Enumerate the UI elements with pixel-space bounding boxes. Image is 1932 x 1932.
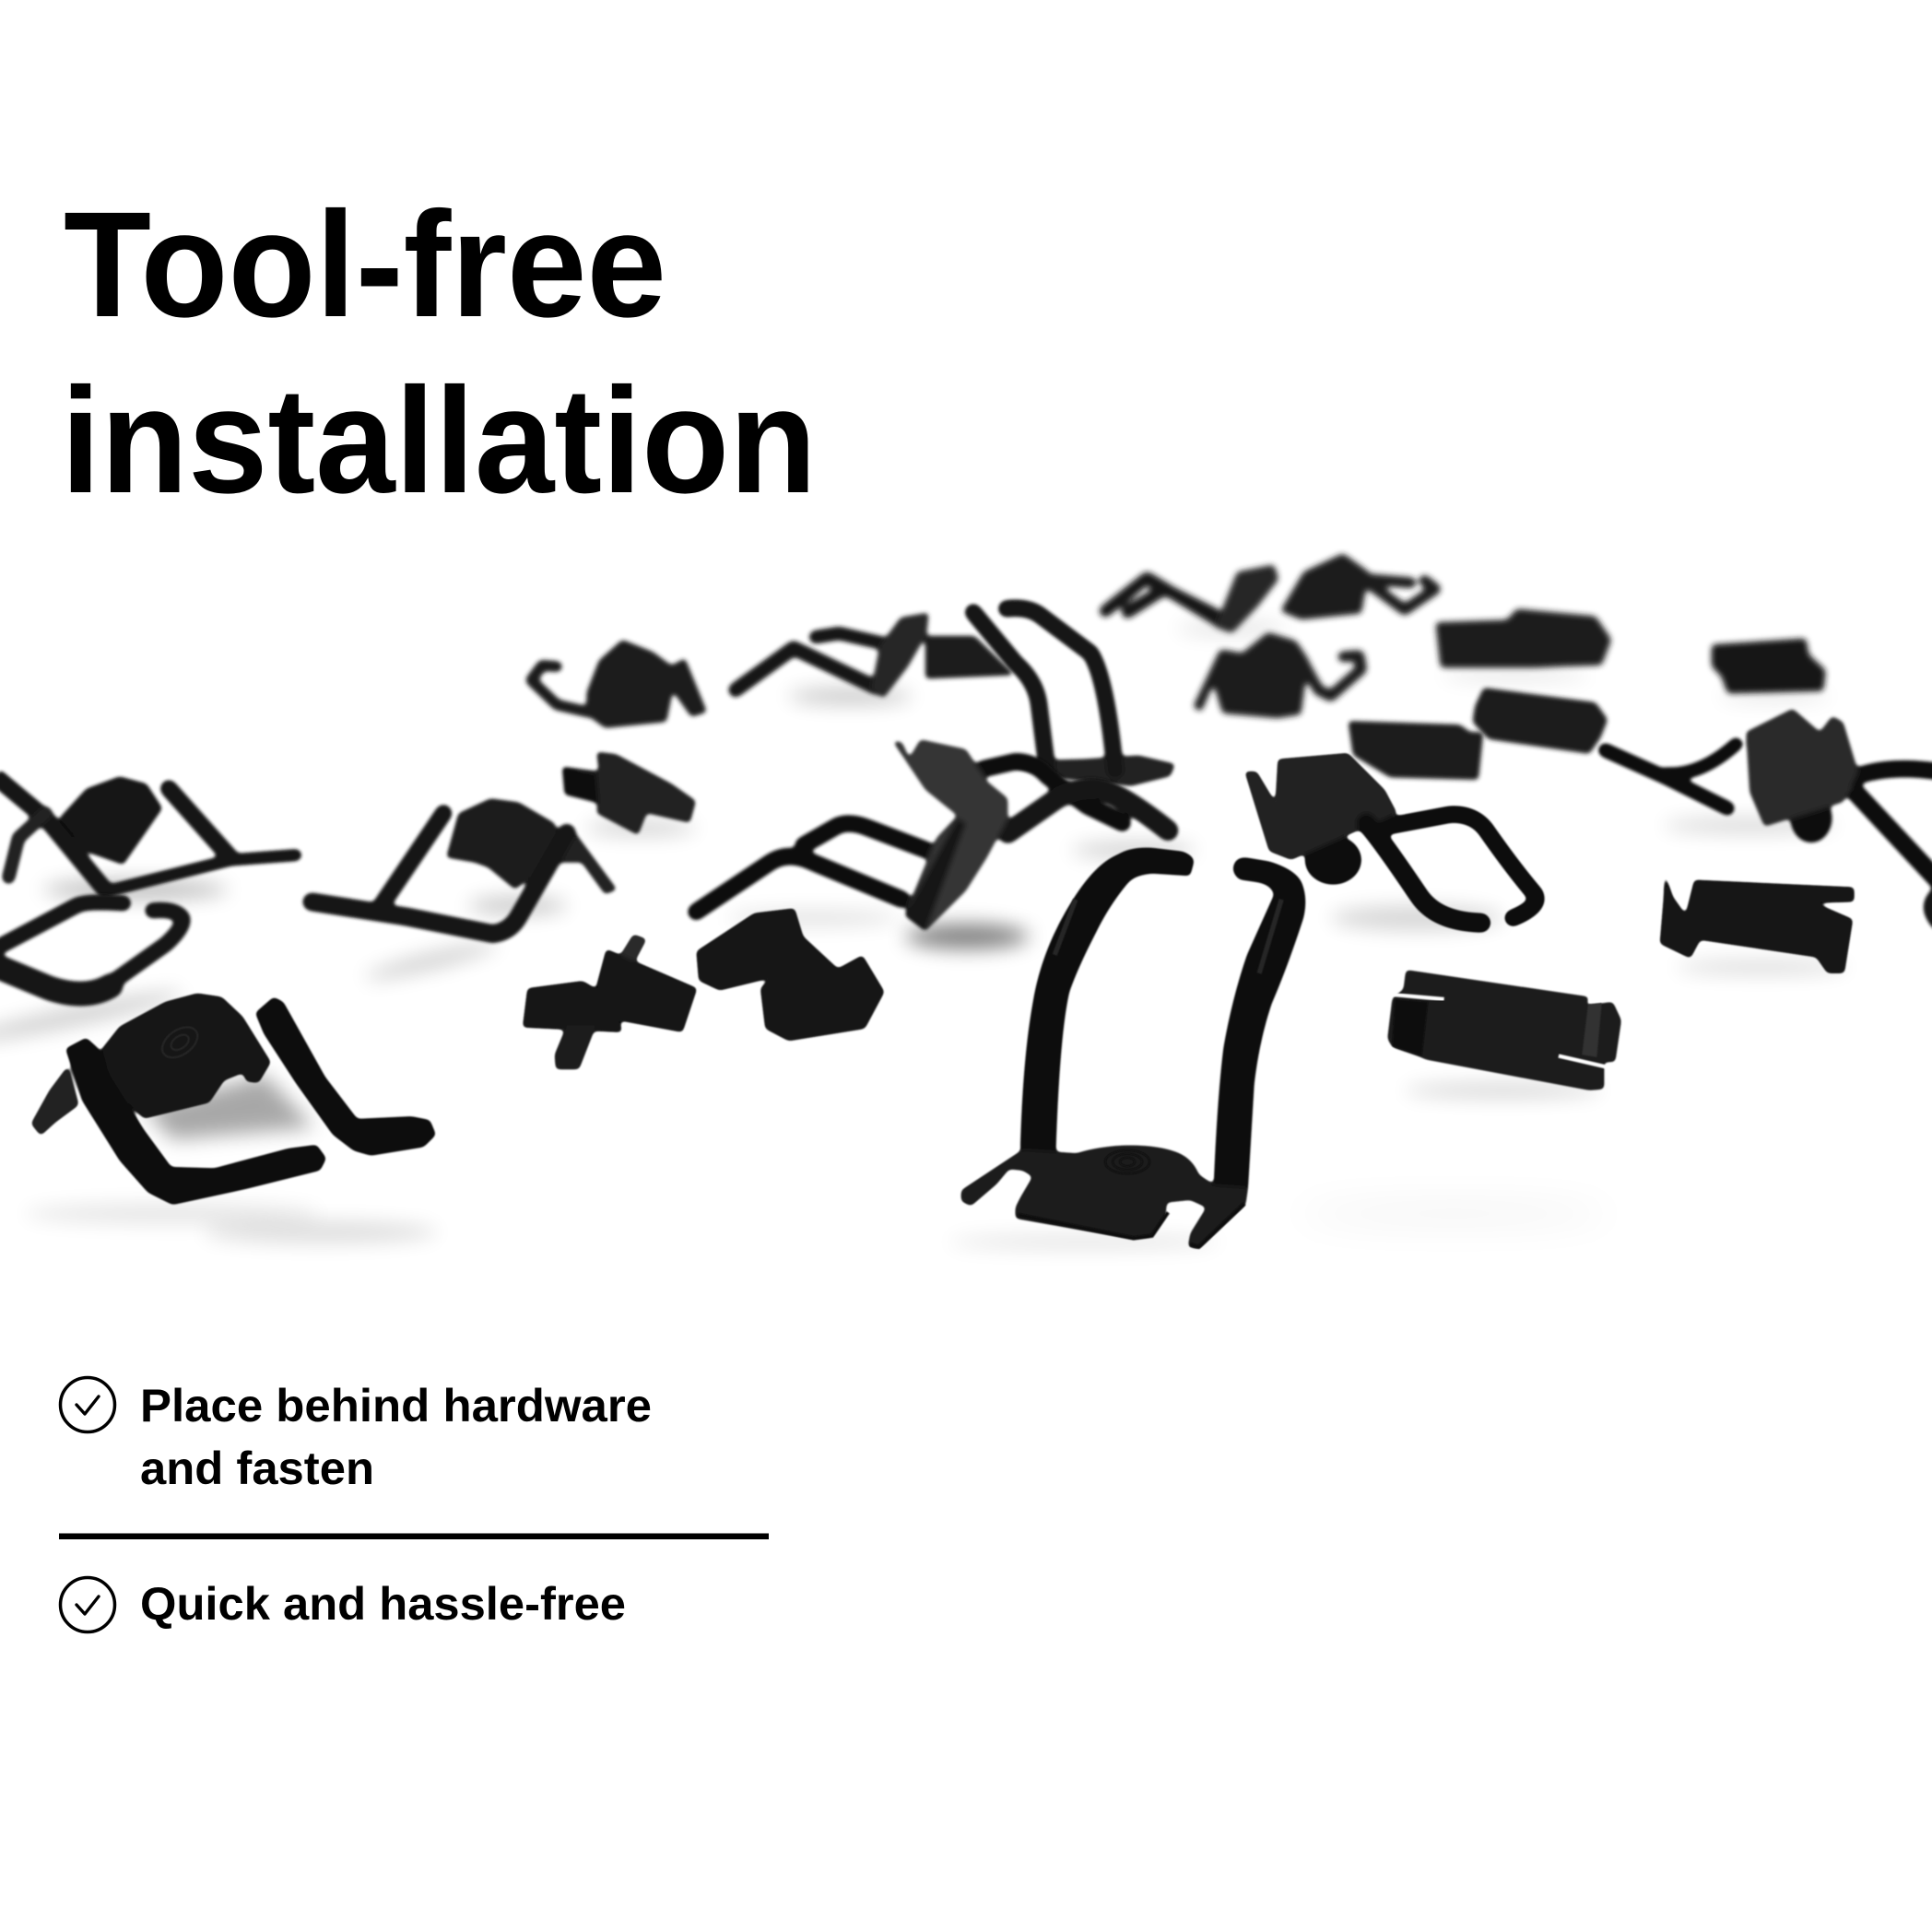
title: Tool-free: [64, 180, 666, 348]
clip: far right partly cropped: [1606, 709, 1932, 933]
block: small connector left: [562, 751, 696, 835]
clip: far centre front view: [1193, 632, 1361, 718]
clip: far top pair right: [1280, 553, 1435, 619]
clip: rear angled: [736, 612, 1015, 699]
clip: front left: [30, 993, 436, 1205]
clip: lower left frame partly cropped: [0, 902, 183, 994]
divider line: [59, 1534, 769, 1539]
block: H shaped connector: [696, 908, 885, 1042]
icon: check circle: [61, 1377, 114, 1432]
text: place behind hardware: Place behind hardware: [140, 1380, 652, 1431]
text: quick and hassle-free: Quick and hassle-free: [140, 1578, 626, 1630]
title: installation: [61, 356, 817, 524]
clip: rear standing: [973, 608, 1175, 786]
clip: front centre standing: [961, 847, 1305, 1249]
logo mark: [157, 1021, 203, 1064]
logo mark: [1105, 1150, 1149, 1173]
clip: centre tilted: [696, 739, 1168, 932]
clip body: [30, 993, 436, 1205]
edge: right tab: [1582, 1003, 1602, 1057]
block: cross shaped connector: [523, 934, 698, 1069]
slot: bottom right: [1559, 1056, 1607, 1067]
bullet 2: [61, 1578, 626, 1632]
arm highlights: [1054, 900, 1281, 973]
title: [61, 180, 817, 524]
slot: top left: [1390, 995, 1444, 999]
clip: mid left: [312, 798, 618, 934]
block: right connector: [1660, 872, 1855, 973]
plate front edge: [1018, 1204, 1244, 1247]
clip: right mid: [1244, 753, 1536, 923]
clip: far left spider: [531, 640, 707, 728]
block: front connector with slots: [1387, 970, 1621, 1090]
block: mid connector lower: [1348, 721, 1483, 780]
icon: check circle: [61, 1578, 114, 1632]
clip body: [961, 847, 1305, 1249]
clip: back left partly cropped: [0, 776, 296, 892]
text: place behind hardware: and fasten: [140, 1443, 374, 1494]
clip: far top pair left: [1105, 564, 1278, 633]
edge: left tab: [1392, 999, 1428, 1056]
product photo: scattered black clips: [0, 553, 1932, 1249]
block: far connector: [1435, 608, 1611, 667]
block: mid connector upper: [1472, 688, 1608, 754]
block: far right connector: [1712, 638, 1826, 694]
text: place behind hardware: [140, 1380, 652, 1494]
bullet 1: [61, 1377, 652, 1494]
floor shadows: [0, 622, 1848, 1248]
